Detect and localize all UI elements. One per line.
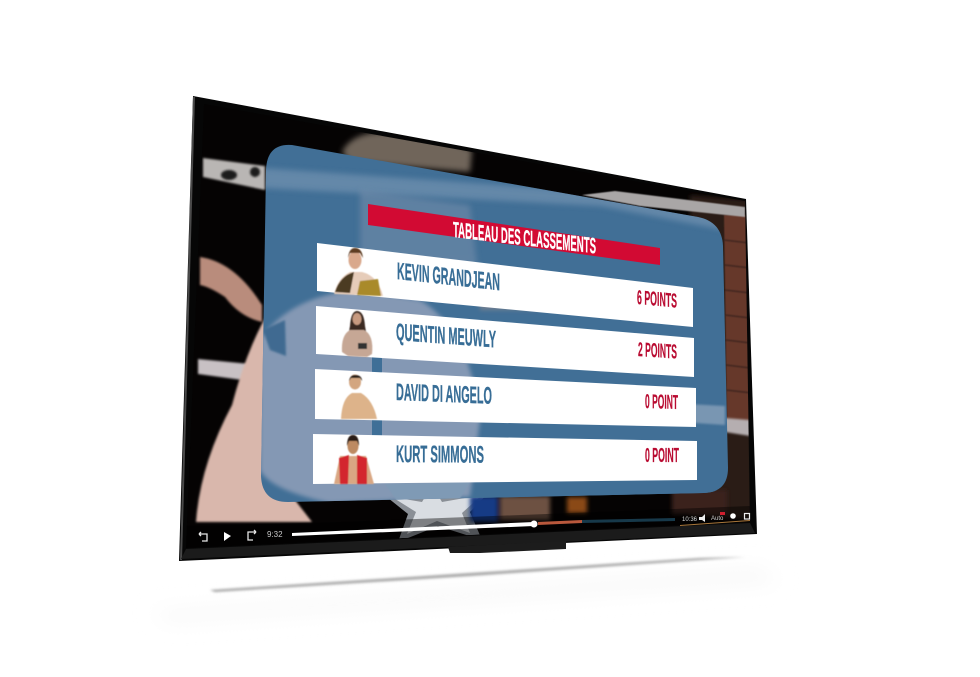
row: Kevin Grandjean: 6 POINTS: [637, 287, 677, 313]
row: Kurt Simmons: 0 POINT: [645, 445, 679, 467]
icon: mini player: [744, 514, 750, 519]
floor shadow: [150, 557, 780, 622]
video frame: [194, 132, 750, 538]
video player controls: [199, 512, 750, 541]
row: Kevin Grandjean: KEVIN GRANDJEAN: [397, 258, 500, 296]
row: Kevin Grandjean: [317, 243, 693, 327]
tv bezel: [179, 96, 757, 561]
icon: play: [224, 532, 231, 541]
lower right rope: [725, 418, 750, 436]
row: David Di Angelo: [315, 369, 696, 427]
header bar: [368, 204, 660, 265]
upper rope right: [582, 191, 745, 217]
current time: 9:32: [267, 530, 283, 539]
row: Quentin Meuwly: QUENTIN MEUWLY: [396, 319, 496, 353]
icon: forward: [248, 530, 256, 540]
row: Kurt Simmons: [313, 434, 697, 484]
body: [196, 318, 312, 522]
portrait: David: [341, 374, 377, 419]
total time: 10:36: [682, 517, 698, 523]
header bar: TABLEAU DES CLASSEMENTS: [453, 217, 596, 258]
lower bezel sheen: [181, 523, 755, 559]
arm: [200, 257, 262, 322]
icon: volume: [699, 514, 705, 522]
quality label: Auto: [711, 516, 724, 522]
icon: rewind: [199, 532, 207, 541]
progress played: [292, 522, 534, 536]
progress remaining: [582, 518, 675, 523]
star: [390, 498, 483, 538]
row: Quentin Meuwly: [316, 306, 694, 377]
row: David Di Angelo: 0 POINT: [645, 391, 678, 414]
wrestler hair: [342, 132, 472, 172]
tv stand: [448, 541, 566, 553]
upper rope left: [203, 158, 265, 190]
panel base: [261, 145, 728, 502]
progress buffered: [538, 520, 582, 525]
bezel highlight: [180, 97, 195, 560]
television: [179, 95, 760, 565]
brick highlight: [724, 214, 748, 422]
lower rope left: [198, 359, 250, 381]
scrubber: [530, 520, 538, 528]
rope marks: [221, 167, 260, 180]
icon: settings: [730, 513, 736, 519]
translucent panel: [260, 145, 728, 505]
control bar: [294, 506, 750, 538]
gold line: [680, 520, 750, 526]
portrait: Kevin: [334, 248, 383, 296]
panel see-through shapes: [260, 168, 725, 505]
crowd colors: [470, 490, 727, 522]
row: David Di Angelo: DAVID DI ANGELO: [396, 379, 492, 410]
hd badge: [720, 512, 725, 515]
brick wall: [690, 195, 752, 520]
portrait: Kurt: [334, 435, 374, 484]
row: Quentin Meuwly: 2 POINTS: [638, 339, 677, 364]
row: Kurt Simmons: KURT SIMMONS: [396, 441, 484, 469]
portrait: Quentin: [342, 311, 372, 357]
